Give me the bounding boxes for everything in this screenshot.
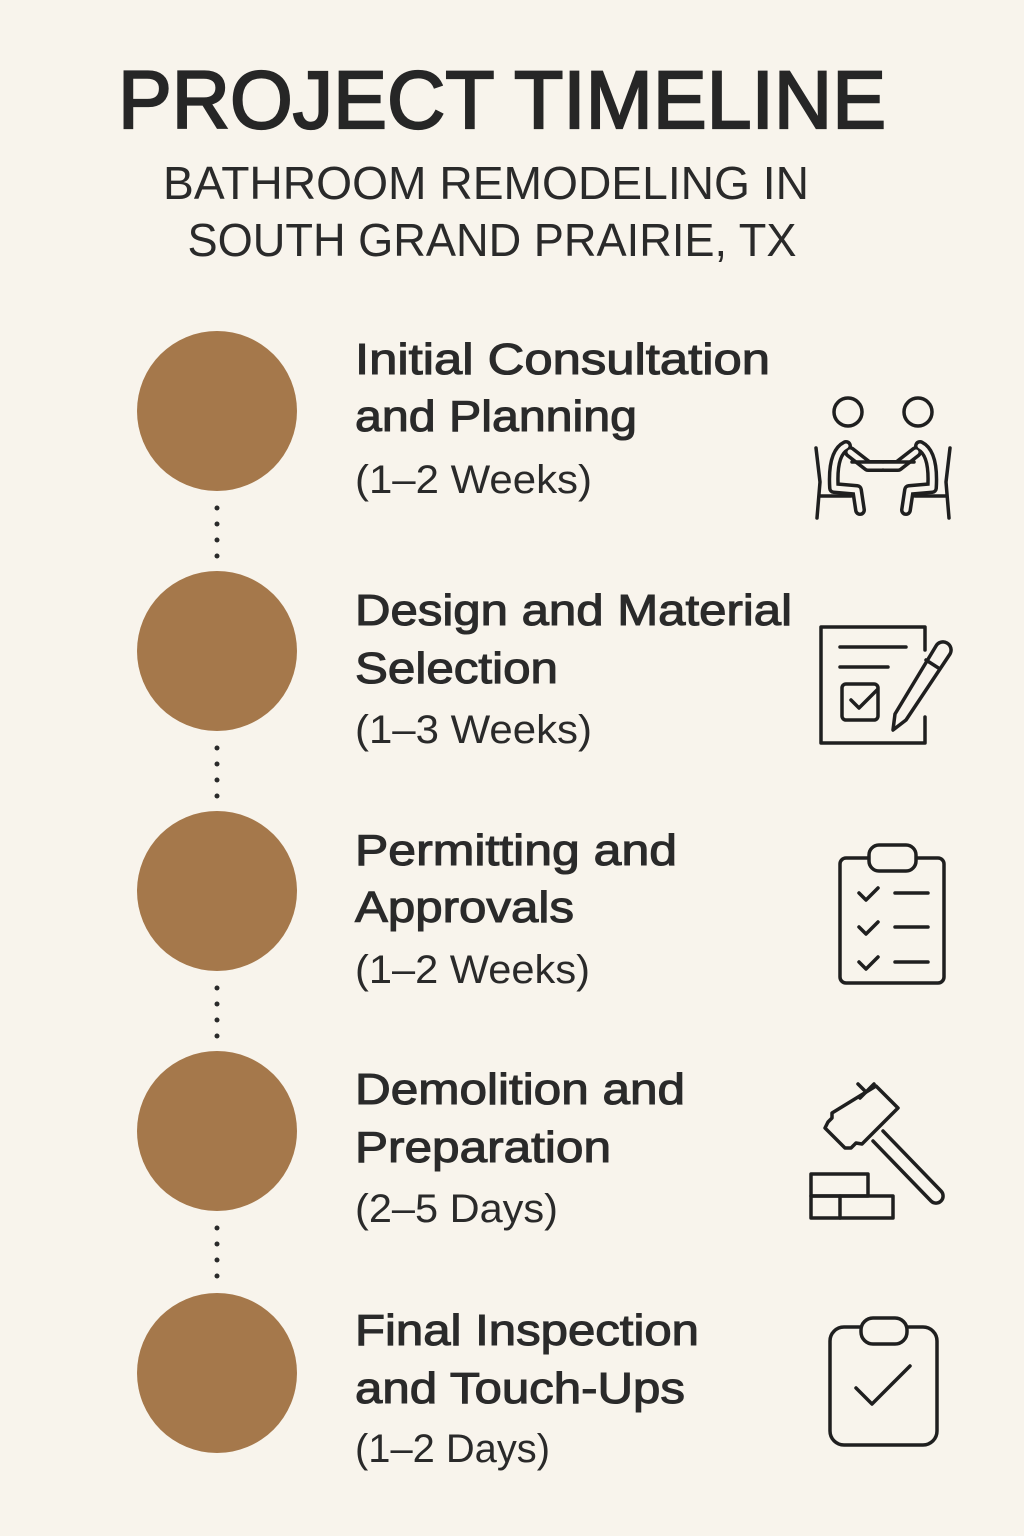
text 5: [355, 1306, 699, 1471]
title: PROJECT TIMELINE: [118, 55, 886, 146]
subtitle: SOUTH GRAND PRAIRIE, TX: [188, 214, 796, 266]
step 3: [137, 811, 944, 992]
text 2: Selection: [355, 644, 558, 693]
text 4: [355, 1065, 685, 1231]
text 4: Preparation: [355, 1123, 611, 1172]
circle 5: [137, 1293, 297, 1453]
text 1: Initial Consultation: [355, 335, 770, 384]
timeline dotted connectors: [214, 506, 220, 1278]
icon: hammer and bricks: [811, 1084, 943, 1218]
icon: clipboard with check: [830, 1318, 937, 1445]
step 5: [137, 1293, 937, 1471]
circle 2: [137, 571, 297, 731]
subtitle: [163, 157, 809, 266]
step 4: [137, 1051, 943, 1231]
text 2: [355, 586, 792, 752]
text 5: Final Inspection: [355, 1306, 699, 1355]
text 5: (1–2 Days): [355, 1427, 550, 1471]
text 4: Demolition and: [355, 1065, 685, 1114]
text 3: [355, 826, 677, 992]
text 3: Approvals: [355, 883, 574, 932]
text 3: (1–2 Weeks): [355, 948, 590, 992]
circle 4: [137, 1051, 297, 1211]
text 1: (1–2 Weeks): [355, 458, 592, 502]
text 1: and Planning: [355, 392, 637, 441]
text 3: Permitting and: [355, 826, 677, 875]
text 2: (1–3 Weeks): [355, 708, 592, 752]
step 2: [137, 571, 951, 752]
subtitle: BATHROOM REMODELING IN: [163, 157, 809, 209]
text 1: [355, 335, 770, 502]
icon: design checklist with pencil: [821, 627, 951, 743]
circle 1: [137, 331, 297, 491]
step 1: [137, 331, 950, 518]
text 5: and Touch-Ups: [355, 1364, 685, 1413]
circle 3: [137, 811, 297, 971]
icon: permit clipboard: [840, 845, 944, 983]
text 4: (2–5 Days): [355, 1187, 558, 1231]
icon: meeting: [816, 398, 950, 518]
text 2: Design and Material: [355, 586, 792, 635]
